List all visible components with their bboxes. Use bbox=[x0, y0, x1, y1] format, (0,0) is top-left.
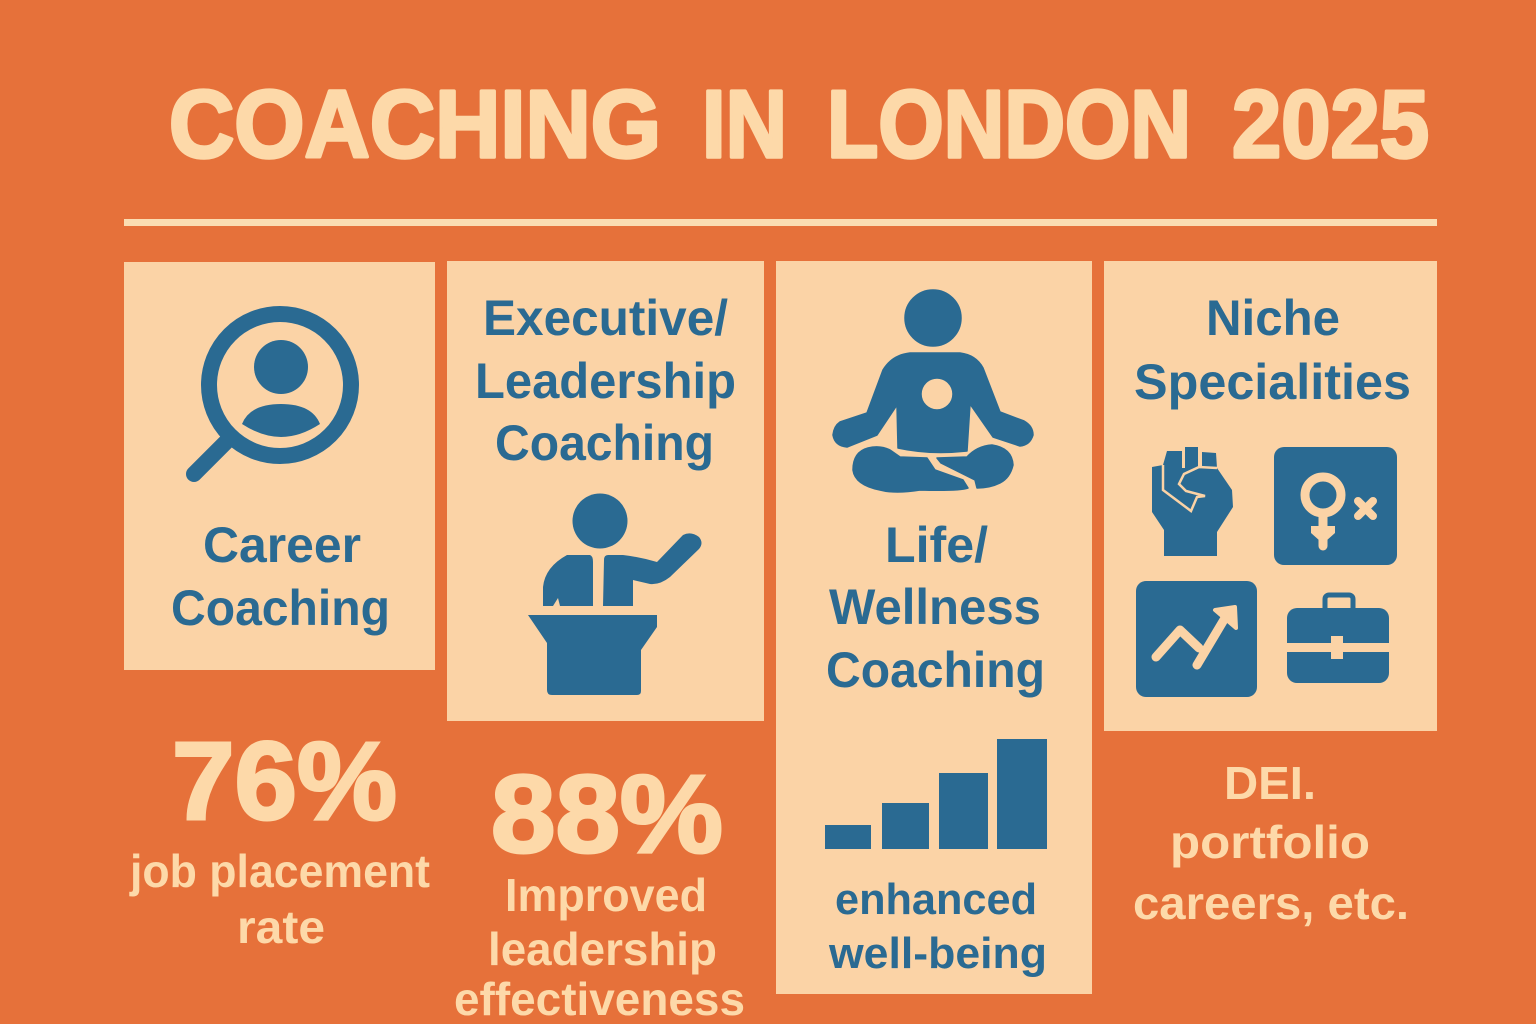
panel heading: life wellness coaching: Life/ bbox=[885, 517, 988, 573]
panel heading: career coaching: Coaching bbox=[171, 580, 390, 636]
panel: niche specialities bbox=[1104, 261, 1437, 731]
icon: magnifier with person bbox=[194, 314, 351, 474]
title bbox=[169, 71, 1429, 178]
icon: female symbol in box bbox=[1274, 447, 1397, 565]
bar chart: enhanced well-being bbox=[825, 739, 1047, 849]
panel heading: niche specialities: Specialities bbox=[1134, 354, 1411, 410]
icon: rising chart in box bbox=[1136, 581, 1257, 697]
icon: speaker at podium bbox=[528, 494, 702, 695]
icon: briefcase bbox=[1285, 595, 1391, 683]
panel heading: executive leadership coaching: Leadership bbox=[475, 353, 736, 409]
stat label: niche examples: DEI. bbox=[1224, 757, 1316, 809]
title: COACHING bbox=[169, 71, 661, 178]
panel heading: life wellness coaching: Coaching bbox=[826, 642, 1045, 698]
panel: executive leadership coaching bbox=[447, 261, 764, 721]
stat: 88% improved leadership effectiveness: effectiveness bbox=[454, 973, 745, 1024]
stat: 88% improved leadership effectiveness: leadership bbox=[488, 923, 717, 975]
stat label: niche examples bbox=[1133, 757, 1409, 929]
stat: 76% job placement rate: 76% bbox=[172, 720, 397, 843]
panel heading: niche specialities: Niche bbox=[1206, 290, 1340, 346]
stat: 76% job placement rate: rate bbox=[237, 901, 325, 953]
stat label: niche examples: careers, etc. bbox=[1133, 877, 1409, 929]
panel heading: life wellness coaching: Wellness bbox=[829, 579, 1041, 635]
title: LONDON bbox=[827, 71, 1191, 178]
stat: 88% improved leadership effectiveness bbox=[454, 753, 745, 1024]
panel heading: career coaching: Career bbox=[203, 517, 361, 573]
stat: 76% job placement rate: job placement bbox=[129, 845, 430, 897]
stat: 88% improved leadership effectiveness: 88% bbox=[491, 753, 723, 876]
stat label: enhanced well-being: well-being bbox=[828, 929, 1047, 978]
panel: career coaching bbox=[124, 262, 435, 670]
panel heading: executive leadership coaching: Executive/ bbox=[483, 290, 728, 346]
panel heading: executive leadership coaching: Coaching bbox=[495, 415, 714, 471]
icon: meditating figure bbox=[833, 290, 1033, 492]
panel heading: life wellness coaching bbox=[826, 517, 1045, 698]
stat: 88% improved leadership effectiveness: Improved bbox=[505, 869, 707, 921]
title: IN bbox=[702, 71, 787, 178]
stat label: niche examples: portfolio bbox=[1170, 816, 1370, 868]
panel heading: career coaching bbox=[171, 517, 390, 636]
panel heading: niche specialities bbox=[1134, 290, 1411, 410]
stat label: enhanced well-being bbox=[828, 875, 1047, 978]
stat: 76% job placement rate bbox=[129, 720, 430, 953]
stat label: enhanced well-being: enhanced bbox=[835, 875, 1037, 924]
panel: life wellness coaching bbox=[776, 261, 1092, 994]
panel heading: executive leadership coaching bbox=[475, 290, 736, 471]
title: 2025 bbox=[1232, 71, 1429, 178]
icon: raised fist bbox=[1152, 447, 1233, 556]
